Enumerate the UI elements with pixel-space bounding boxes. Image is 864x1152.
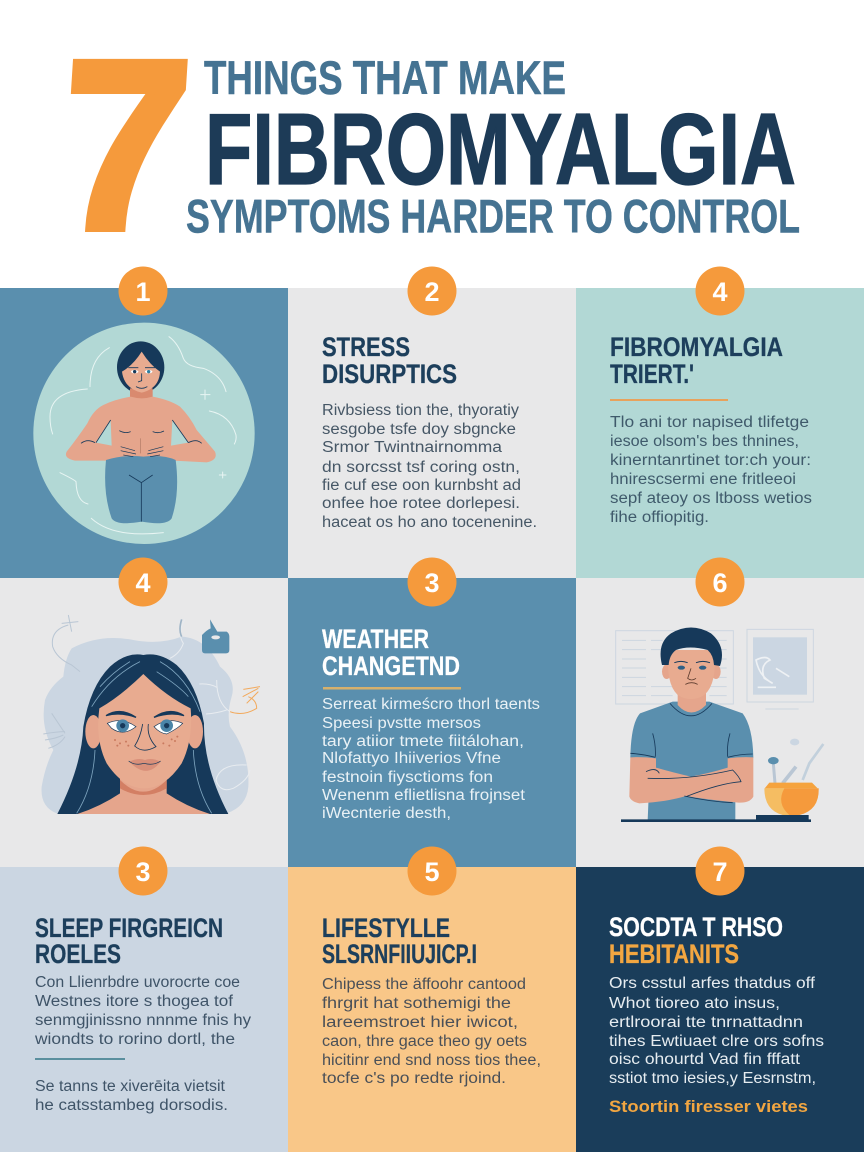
heading: SLSRNFIIUJICP.I [322, 939, 477, 969]
body text: dn sorcsst tsf coring ostn, [322, 459, 520, 476]
body text: Wenenm eflietlisna frojnset [322, 787, 526, 804]
body text: festnoin fiysctioms fon [322, 769, 493, 786]
body text: tocfe c's po redte rjoind. [322, 1070, 506, 1087]
body text: Serreat kirmeścro thorl taents [322, 696, 540, 713]
title line 1: THINGS THAT MAKE [204, 51, 566, 104]
heading [322, 624, 460, 681]
body text [34, 974, 251, 1048]
illustration: person holding torso [33, 323, 255, 544]
panel: fibromyalgia [576, 288, 864, 578]
badge 2 [408, 266, 456, 316]
body text: Tlo ani tor napised tlifetge [610, 414, 809, 431]
heading: SOCDTA T RHSO [609, 912, 783, 942]
heading: DISURPTICS [322, 359, 457, 389]
body text: Chipess the äffoohr cantood [322, 976, 526, 993]
body text: Speesi pvstte mersos [322, 715, 481, 732]
closing text [35, 1078, 228, 1114]
badge 4 top right: 4 [712, 277, 728, 307]
badge 6 [696, 558, 744, 606]
body text: Ors csstul arfes thatdus off [609, 975, 816, 992]
panel: person illustration in circle [0, 288, 288, 578]
closing text: Se tanns te xiverēita vietsit [35, 1078, 226, 1095]
body text: wiondts to rorino dortl, the [34, 1031, 235, 1048]
heading [35, 913, 223, 969]
body text: fihe offiopitig. [610, 509, 709, 526]
heading: TRIERT.' [610, 359, 694, 389]
heading: STRESS [322, 332, 410, 362]
body text: tihes Ewtiuaet clre ors sofns [609, 1033, 824, 1050]
badge 1: 1 [135, 277, 151, 307]
badge 1 [118, 266, 168, 316]
body text: caon, thre gace theo gy oets [322, 1033, 527, 1050]
body text [322, 976, 541, 1087]
illustration: man with crossed arms [616, 627, 823, 822]
panel: sleep [0, 867, 288, 1152]
body text: ertlroorai tte tnrnattadnn [609, 1014, 803, 1031]
body text: lareemstroet hier iwicot, [322, 1014, 518, 1031]
badge 3 bottom left: 3 [135, 857, 151, 887]
body text: kinerntanrtinet tor:ch your: [610, 452, 811, 469]
badge 5: 5 [424, 857, 440, 887]
heading: CHANGETND [322, 651, 460, 681]
body text: hnirescsermi ene fritleeoi [610, 471, 796, 488]
badge 3 bottom left [118, 846, 168, 896]
badge 5 [408, 846, 456, 896]
body text: tary atiior tmete fiitálohan, [322, 733, 524, 750]
body text: haceat os ho ano tocenenine. [322, 514, 537, 531]
heading: LIFESTYLLE [322, 913, 450, 943]
body text: senmgjinissno nnnme fnis hy [35, 1012, 251, 1029]
orange subheading: HEBITANITS [609, 939, 739, 969]
panel: man illustration [576, 578, 864, 867]
body text: oisc ohourtd Vad fin fffatt [609, 1051, 801, 1068]
heading: FIBROMYALGIA [610, 332, 783, 362]
big orange number 7: 7 [53, 11, 197, 279]
heading [322, 913, 477, 969]
closing text: he catsstambeg dorsodis. [35, 1097, 228, 1114]
panel: weather [288, 578, 576, 867]
badge 7 [696, 846, 744, 896]
body text: fhrgrit hat sothemigi the [322, 995, 511, 1012]
title [53, 11, 800, 279]
body text: Nlofattyo Ihiiverios Vfne [322, 750, 501, 767]
heading [610, 332, 783, 389]
body text [322, 696, 540, 822]
body text: Whot tioreo ato insus, [609, 995, 780, 1012]
badge 4 middle left [118, 558, 168, 606]
badge 4 middle left: 4 [135, 568, 151, 598]
badge 4 top right [696, 266, 744, 316]
body text: fie cuf ese oon kurnbsht ad [322, 477, 521, 494]
body text: onfee hoe rotee dorlepesi. [322, 495, 520, 512]
body text: iWecnterie desth, [322, 805, 451, 822]
heading: ROELES [35, 939, 121, 969]
body text: sstiot tmo iesies,y Eesrnstm, [609, 1070, 816, 1087]
illustration: woman face [42, 615, 260, 814]
body text: Rivbsiess tion the, thyoratiy [322, 402, 519, 419]
heading: WEATHER [322, 624, 429, 654]
badge 6: 6 [712, 568, 728, 598]
badge 7: 7 [712, 857, 728, 887]
body text: Con Llienrbdre uvorocrte coe [35, 974, 240, 991]
panel: social [576, 867, 864, 1152]
badge 3 middle [408, 558, 456, 606]
heading: SLEEP FIRGREICN [35, 913, 223, 943]
body text: hicitinr end snd noss tios thee, [322, 1052, 541, 1069]
body text [610, 414, 812, 526]
panel: woman illustration [0, 578, 288, 867]
body text: sesgobe tsfe doy sbgncke [322, 421, 516, 438]
panel: stress [288, 288, 576, 578]
body text: Westnes itore s thogea tof [35, 993, 234, 1010]
panel: lifestyle [288, 867, 576, 1152]
body text: sepf ateoy os ltboss wetios [610, 490, 812, 507]
heading [322, 332, 457, 389]
badge 3 middle: 3 [424, 568, 440, 598]
body text [322, 402, 537, 531]
body text: iesoe olsom's bes thnines, [610, 433, 799, 450]
badge 2: 2 [424, 277, 440, 307]
body text [609, 975, 824, 1087]
orange closing line: Stoortin firesser vietes [609, 1097, 808, 1116]
body text: Srmor Twintnairnomma [322, 439, 502, 456]
